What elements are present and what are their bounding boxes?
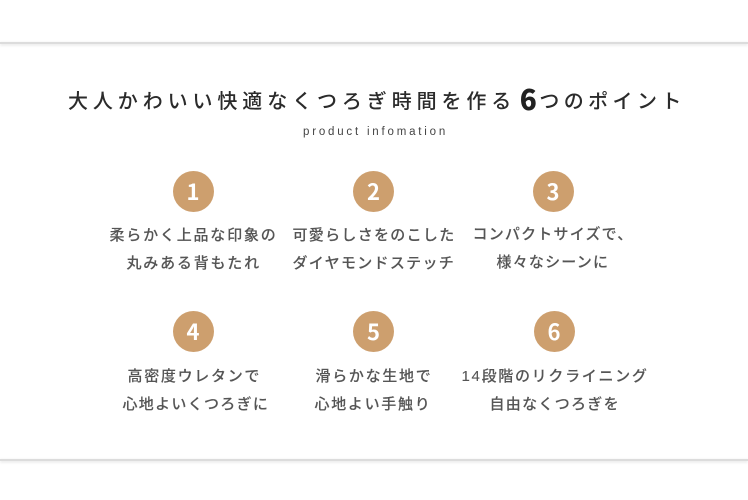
point 3 text line 2: 様々なシーンに [496,254,609,271]
number badge 2: 2 [367,175,380,207]
number badge 4 [172,311,214,352]
point 1 text line 1: 柔らかく上品な印象の [110,227,278,244]
number badge 3 [532,171,574,212]
point 5 text line 1: 滑らかな生地で [316,368,432,385]
point 1 text line 2: 丸みある背もたれ [126,255,261,272]
panel: point 6 [462,311,649,413]
point 2 text line 1: 可愛らしさをのこした [292,227,456,244]
number badge 6: 6 [548,315,560,347]
panel: point 3 [472,171,633,271]
panel: point 4 [122,311,269,413]
subtitle: product infomation [303,126,448,138]
number badge 5 [353,311,394,352]
panel: point 1 [110,171,278,272]
point 6 text line 2: 自由なくつろぎを [490,396,620,413]
point 2 text line 2: ダイヤモンドステッチ [292,255,455,272]
panel: point 5 [314,311,432,413]
point 4 text line 1: 高密度ウレタンで [128,368,261,385]
point 6 text line 1: 14段階のリクライニング [462,368,649,385]
number badge 1: 1 [186,175,199,207]
number badge 6 [534,311,574,352]
point 3 text line 1: コンパクトサイズで、 [472,226,633,243]
point 4 text line 2: 心地よいくつろぎに [122,396,269,413]
number badge 2 [353,171,394,212]
number badge 3: 3 [546,175,559,207]
number badge 5: 5 [367,315,380,347]
point 5 text line 2: 心地よい手触り [314,396,431,413]
number badge 1 [172,171,214,212]
number badge 4: 4 [186,315,199,347]
panel: point 2 [292,171,456,272]
title: 大人かわいい快適なくつろぎ時間を作る6つのポイント [68,78,686,118]
